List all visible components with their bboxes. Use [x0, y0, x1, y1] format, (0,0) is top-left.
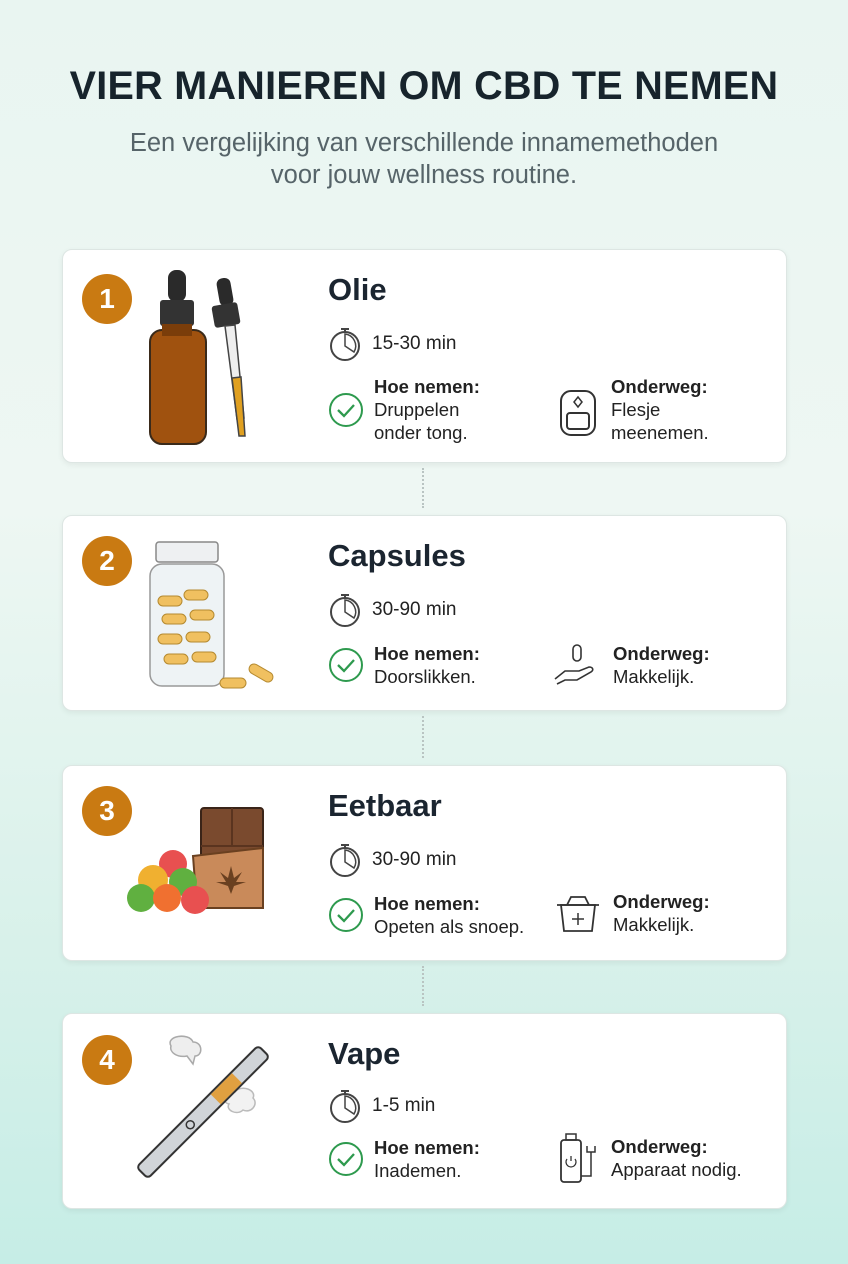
badge 1: 1	[99, 283, 115, 314]
on the go: Makkelijk.	[613, 914, 694, 935]
panel: capsules	[62, 515, 787, 711]
timer: 30-90 min	[372, 599, 456, 620]
how to take	[329, 1137, 480, 1181]
title: VIER MANIEREN OM CBD TE NEMEN	[70, 64, 778, 108]
panel: eetbaar	[62, 765, 787, 961]
arrow	[422, 966, 426, 1006]
icon: capsule jar	[149, 541, 274, 688]
badge 3: 3	[99, 795, 115, 826]
on the go: Onderweg:	[611, 376, 708, 397]
timer: 15-30 min	[372, 333, 456, 354]
on the go: Onderweg:	[611, 1136, 708, 1157]
icon: gummies and chocolate	[127, 807, 264, 914]
icon: vape pen	[137, 1035, 269, 1178]
timer	[330, 594, 456, 627]
on the go	[554, 643, 710, 687]
how to take	[329, 643, 480, 687]
on the go	[560, 376, 709, 443]
timer	[330, 844, 456, 877]
on the go: Onderweg:	[613, 891, 710, 912]
timer	[330, 1090, 435, 1123]
how to take: Druppelen	[374, 399, 459, 420]
panel: olie	[62, 249, 787, 463]
how to take	[329, 376, 480, 443]
arrow	[422, 468, 426, 508]
on the go: Makkelijk.	[613, 666, 694, 687]
timer: 30-90 min	[372, 849, 456, 870]
how to take: Opeten als snoep.	[374, 916, 524, 937]
on the go: Apparaat nodig.	[611, 1159, 742, 1180]
how to take: Doorslikken.	[374, 666, 476, 687]
how to take: Inademen.	[374, 1160, 461, 1181]
subtitle: voor jouw wellness routine.	[271, 161, 577, 189]
heading: Vape: Vape	[328, 1036, 400, 1071]
on the go	[560, 1133, 742, 1183]
badge 4: 4	[99, 1044, 115, 1075]
heading: Eetbaar: Eetbaar	[328, 788, 442, 823]
heading: Capsules: Capsules	[328, 538, 466, 573]
badge 4	[82, 1035, 132, 1085]
badge 1	[82, 274, 132, 324]
how to take: Hoe nemen:	[374, 893, 480, 914]
how to take	[329, 893, 524, 937]
arrow	[422, 716, 426, 758]
how to take: onder tong.	[374, 422, 468, 443]
how to take: Hoe nemen:	[374, 1137, 480, 1158]
timer: 1-5 min	[372, 1095, 435, 1116]
icon: oil bottle	[149, 270, 246, 445]
badge 2	[82, 536, 132, 586]
timer	[330, 328, 456, 361]
heading: Olie: Olie	[328, 272, 387, 307]
on the go: Onderweg:	[613, 643, 710, 664]
panel: vape	[62, 1013, 787, 1209]
badge 2: 2	[99, 545, 115, 576]
on the go: Flesje	[611, 399, 660, 420]
badge 3	[82, 786, 132, 836]
subtitle: Een vergelijking van verschillende innamemethoden	[130, 129, 718, 157]
on the go: meenemen.	[611, 422, 709, 443]
on the go	[557, 891, 710, 935]
how to take: Hoe nemen:	[374, 643, 480, 664]
subtitle	[130, 129, 718, 189]
how to take: Hoe nemen:	[374, 376, 480, 397]
